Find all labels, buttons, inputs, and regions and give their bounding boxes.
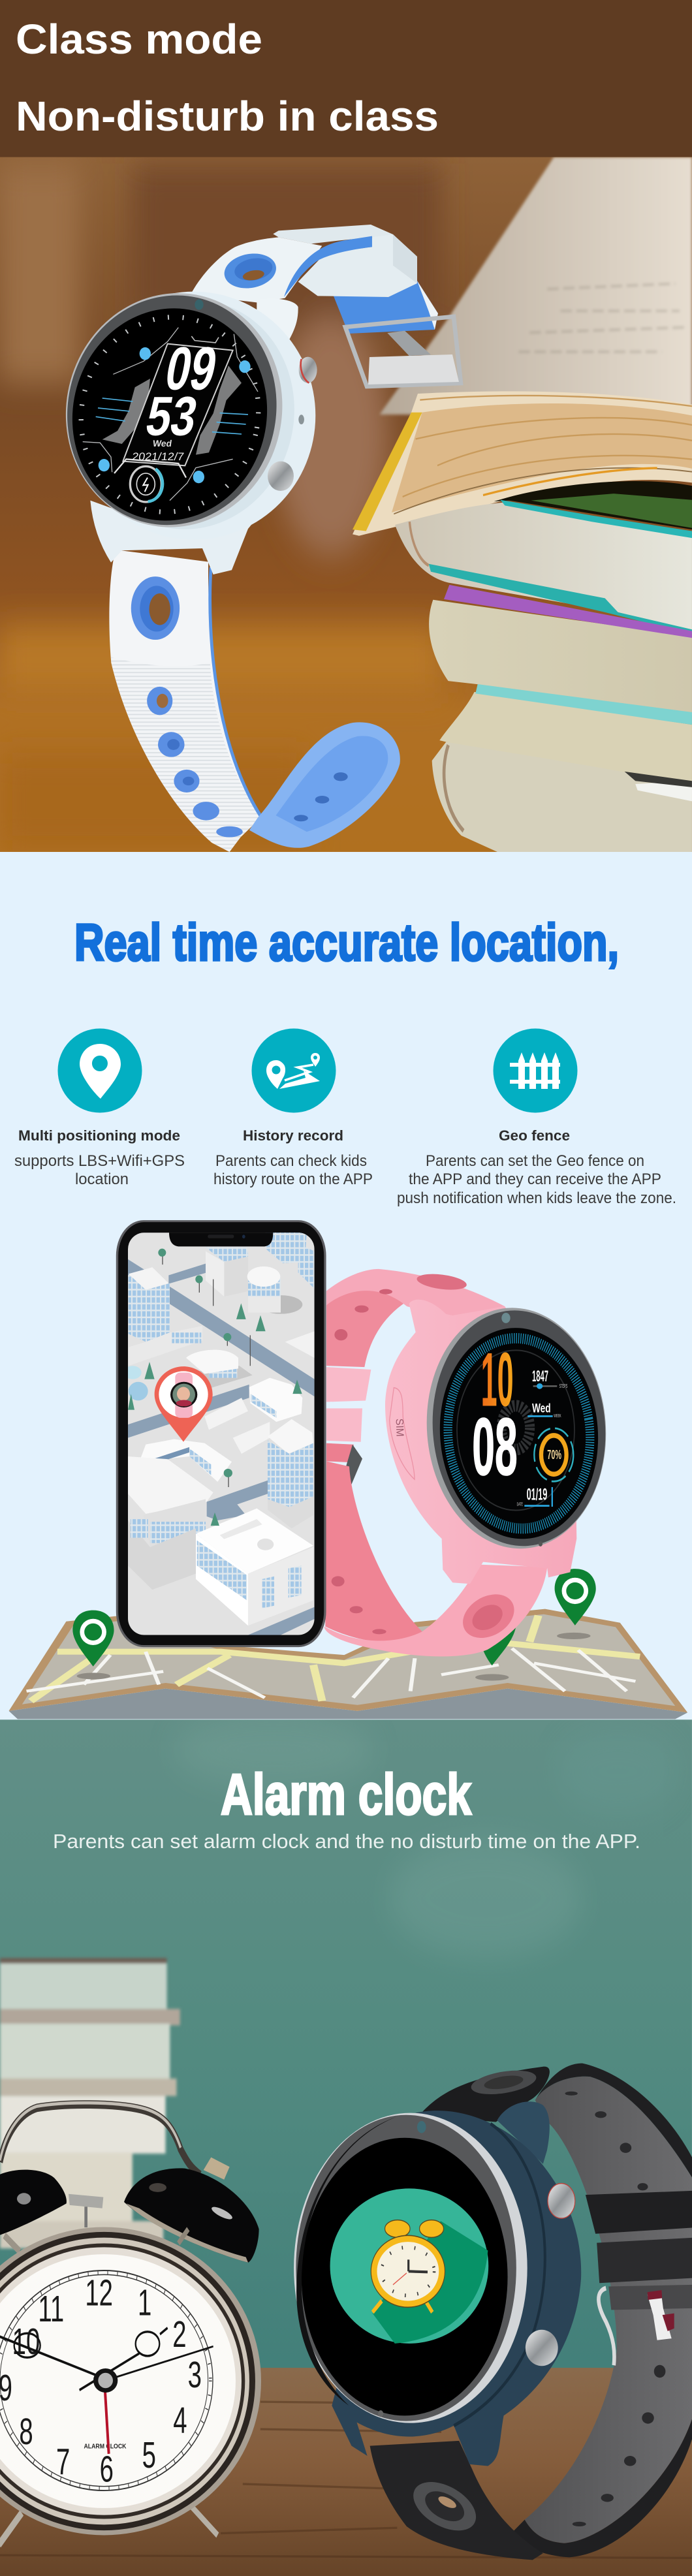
book 4 [439, 692, 692, 783]
panel: alarm clock backdrop [0, 1712, 692, 2576]
clock numerals [0, 2272, 202, 2490]
text: geo fence: the APP and they can receive the APP [409, 1170, 661, 1188]
alarm clock: ALARM CLOCK [84, 2442, 126, 2450]
side buttons [299, 357, 317, 383]
pink watch: 1847 [532, 1367, 548, 1385]
roads [128, 1259, 315, 1635]
pink watch: STEPS [559, 1383, 567, 1389]
clock numerals: 6 [100, 2449, 114, 2490]
left bell [0, 2170, 67, 2235]
text: history record: history route on the APP [213, 1170, 373, 1188]
clock numerals: 3 [188, 2355, 202, 2396]
case [497, 2101, 550, 2164]
green pin: right [555, 1569, 596, 1639]
handle [0, 2105, 200, 2175]
strap gray inner surface [525, 2077, 692, 2543]
phone screen: 3D city map [124, 1233, 315, 1635]
text: alarm clock description: Parents can set alarm clock and the no disturb time on the APP. [53, 1830, 640, 1853]
hammer [69, 2194, 103, 2208]
pink watch: 01/19 [527, 1485, 547, 1503]
watch: head, upper strap and buckle [42, 225, 461, 574]
lower band [325, 1461, 422, 1642]
green pin: left [72, 1610, 114, 1679]
map and pins [9, 1569, 687, 1719]
clock numerals: 5 [142, 2435, 156, 2476]
clock numerals: 8 [19, 2411, 33, 2453]
buckle [345, 317, 461, 386]
notch [169, 1233, 273, 1246]
dark gap and green cover [494, 481, 692, 529]
text: multi positioning mode: Multi positioning mode [18, 1127, 180, 1144]
blurred open book page [379, 157, 692, 415]
text: geo fence: Geo fence [499, 1127, 570, 1144]
clock numerals: 12 [85, 2272, 113, 2314]
case [385, 1300, 576, 1584]
buildings [206, 1248, 248, 1262]
time digits: 09 [160, 334, 223, 402]
pink watch: SIM [394, 1419, 405, 1437]
strap loops [586, 2191, 692, 2234]
text: multi positioning mode [14, 1127, 185, 1188]
text: geo fence: Parents can set the Geo fence on [426, 1152, 644, 1170]
glass and bezel [42, 272, 306, 549]
panel: class mode photo backdrop [0, 157, 692, 853]
side buttons [548, 2184, 575, 2218]
minute track [0, 2270, 213, 2490]
pink watch: DATE [517, 1502, 523, 1507]
pink watch: 08 [472, 1402, 518, 1492]
watch dial [62, 299, 277, 529]
icon: fence [494, 1029, 577, 1112]
right bell [124, 2168, 259, 2263]
strap front [370, 2441, 543, 2560]
stacked books, blurred [0, 1958, 180, 2248]
strap holes [565, 2092, 665, 2526]
phone [116, 1220, 326, 1647]
clock numerals: 4 [173, 2400, 187, 2442]
watch: navy with black strap [294, 2064, 692, 2560]
clock numerals: 11 [38, 2289, 64, 2330]
strap back [326, 1289, 411, 1367]
pink watch: Wed [532, 1401, 551, 1415]
heading: alarm clock: Alarm clock [221, 1762, 472, 1827]
watch dial: 2021/12/7 [131, 450, 185, 463]
camera [195, 300, 204, 310]
clock numerals: 7 [56, 2442, 70, 2483]
glass and screen [294, 2113, 527, 2423]
pink watch [324, 1269, 622, 1656]
icon: location pin [57, 1029, 142, 1112]
alarm clock [0, 2103, 261, 2545]
icon: history route [252, 1029, 336, 1112]
panel: class mode header [0, 0, 692, 157]
trees and poles [163, 1254, 250, 1487]
panel: real time location [0, 852, 692, 1720]
phone body [116, 1220, 326, 1647]
strap holes [131, 576, 180, 640]
book 5 [432, 742, 692, 855]
watch dial: Wed [152, 438, 172, 448]
text: history record: History record [243, 1127, 343, 1144]
book 2 [395, 503, 692, 634]
clock body [0, 2227, 261, 2535]
book 3 [429, 600, 692, 715]
upper strap [273, 225, 393, 243]
green pin: middle [475, 1610, 516, 1680]
feet [191, 2506, 217, 2535]
clock numerals: 1 [138, 2282, 151, 2323]
text: history record: Parents can check kids [215, 1152, 367, 1170]
pink watch: WEEK [554, 1414, 561, 1419]
book stack [353, 391, 692, 855]
map [9, 1609, 687, 1719]
wooden table [0, 2368, 692, 2576]
text: multi positioning mode: supports LBS+Wifi+GPS [14, 1152, 185, 1170]
strap top front [422, 2067, 550, 2122]
location marker [155, 1366, 213, 1442]
strap loops [326, 1367, 371, 1402]
heading: class mode: Class mode [16, 16, 262, 63]
text: multi positioning mode: location [75, 1170, 129, 1188]
pink watch: 70% [547, 1448, 561, 1463]
pink watch: 10 [481, 1336, 514, 1422]
clock hands [0, 2328, 213, 2390]
app icon: alarm clock [330, 2188, 488, 2344]
clock numerals: 10 [12, 2321, 40, 2363]
watch dial: 53 [141, 386, 202, 447]
strap black rim [535, 2064, 692, 2177]
screen [411, 1291, 622, 1565]
case [90, 492, 279, 574]
watch: lower strap [109, 550, 400, 852]
clock numerals: 2 [172, 2314, 187, 2355]
heading: non-disturb in class: Non-disturb in class [16, 93, 439, 140]
text: geo fence [397, 1127, 676, 1207]
text: history record [213, 1127, 373, 1188]
text: geo fence: push notification when kids leave the zone. [397, 1189, 676, 1207]
book 1: pages [353, 391, 692, 536]
